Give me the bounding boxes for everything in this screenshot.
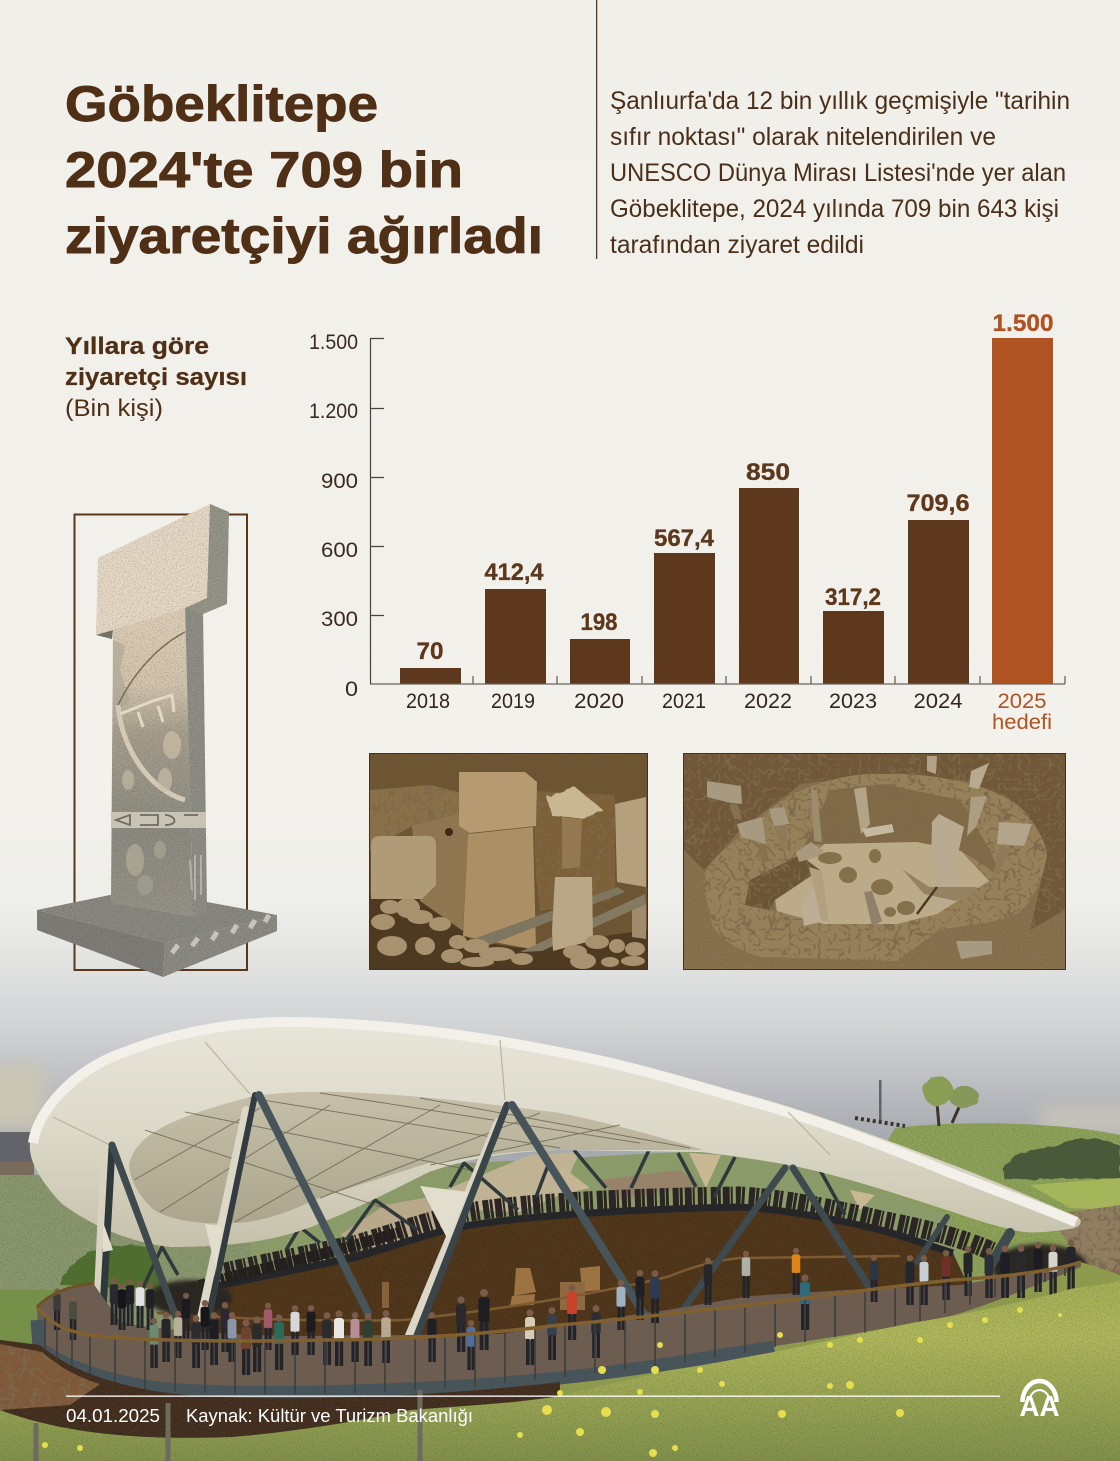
intro paragraph: sıfır noktası" olarak nitelendirilen ve bbox=[610, 123, 996, 151]
caption heading: ziyaretçi sayısı bbox=[65, 364, 247, 391]
far hill and green field bbox=[0, 1123, 1120, 1345]
y axis: 1.500 bbox=[309, 331, 358, 354]
foreground grass bbox=[0, 1280, 1120, 1461]
ground under deck edge bbox=[540, 1262, 1120, 1425]
rubble walls bbox=[370, 785, 470, 850]
sky and horizon bbox=[0, 1065, 1120, 1177]
title: 2024'te 709 bin bbox=[65, 142, 463, 198]
y axis: 900 bbox=[321, 470, 358, 493]
fourth leg pair bbox=[667, 1168, 871, 1332]
excavation pit bbox=[170, 1207, 975, 1348]
inner lower walkway rail bbox=[157, 1256, 900, 1321]
AA logo: AA bbox=[1020, 1391, 1060, 1423]
year labels: 2023 bbox=[829, 690, 877, 713]
y axis bbox=[309, 331, 384, 701]
y axis: 300 bbox=[321, 608, 358, 631]
bar value labels: 412,4 bbox=[484, 559, 544, 586]
caption heading bbox=[65, 333, 247, 391]
pillar base bbox=[37, 895, 277, 977]
caption unit: (Bin kişi) bbox=[65, 395, 163, 422]
year labels bbox=[406, 690, 1052, 734]
year labels: 2025 bbox=[998, 690, 1046, 713]
right end legs bbox=[917, 1217, 1010, 1266]
intro paragraph: Göbeklitepe, 2024 yılında 709 bin 643 kişi bbox=[610, 195, 1059, 223]
footer bbox=[66, 1381, 1060, 1426]
steel support legs bbox=[96, 1095, 1010, 1338]
source: Kaynak: Kültür ve Turizm Bakanlığı bbox=[186, 1406, 473, 1426]
back truss legs bbox=[142, 1150, 845, 1290]
year labels: 2019 bbox=[491, 690, 535, 713]
main photo: Göbeklitepe site under canopy bbox=[0, 1018, 1120, 1461]
standing pillars bbox=[707, 756, 1032, 959]
canopy outer shell bbox=[30, 1018, 1081, 1247]
photo: circular enclosure bbox=[683, 753, 1066, 970]
second leg pair bbox=[201, 1095, 368, 1318]
ceiling membrane bbox=[129, 1092, 703, 1223]
deck fascia bbox=[37, 1320, 774, 1392]
pillar top slab bbox=[96, 504, 229, 639]
title: Göbeklitepe bbox=[65, 76, 378, 132]
canopy seams bbox=[53, 1040, 830, 1155]
lower deck bbox=[37, 1262, 1081, 1392]
yellow flowers bbox=[42, 1307, 1062, 1457]
bar value labels: 567,4 bbox=[654, 525, 715, 552]
tree and lamp pole on hill bbox=[855, 1076, 979, 1126]
y axis: 0 bbox=[345, 678, 358, 701]
pillar carvings and tree shadow bbox=[111, 632, 269, 953]
background seen through canopy bbox=[250, 1150, 960, 1300]
enclosure floor bbox=[774, 842, 989, 924]
x axis bbox=[370, 676, 1065, 684]
intro paragraph bbox=[610, 87, 1070, 259]
ceiling cable grid bbox=[134, 1093, 690, 1222]
bar value labels: 317,2 bbox=[825, 584, 881, 611]
canopy roof bbox=[30, 1018, 1081, 1247]
photo frame bbox=[683, 753, 1066, 970]
y axis: 600 bbox=[321, 539, 358, 562]
upper walkway with crowd bbox=[148, 1196, 1088, 1316]
T-pillar image with frame bbox=[37, 504, 277, 977]
rocky soil below deck bbox=[0, 1340, 560, 1445]
year labels: 2018 bbox=[406, 690, 450, 713]
frame bbox=[74, 514, 247, 970]
footer rule bbox=[66, 1396, 1000, 1397]
bar value labels: 1.500 bbox=[992, 310, 1054, 337]
wooden sticks bbox=[917, 887, 937, 914]
bar value labels: 850 bbox=[746, 459, 790, 486]
ring wall bbox=[704, 774, 1047, 961]
year labels: 2024 bbox=[914, 690, 963, 713]
date: 04.01.2025 bbox=[66, 1406, 160, 1426]
outer rubble walls bbox=[684, 754, 1065, 930]
bar value labels: 70 bbox=[416, 638, 444, 665]
bar chart bbox=[309, 310, 1065, 734]
inner back wall bbox=[805, 784, 1000, 875]
fence posts bbox=[36, 1390, 420, 1461]
standing stones bbox=[412, 814, 468, 931]
title bbox=[65, 76, 543, 264]
title: ziyaretçiyi ağırladı bbox=[65, 208, 543, 264]
pillar shaft bbox=[111, 604, 207, 917]
bar value labels bbox=[416, 310, 1054, 665]
left leg pair bbox=[96, 1145, 182, 1333]
intro paragraph: UNESCO Dünya Mirası Listesi'nde yer alan bbox=[610, 159, 1066, 187]
deck rail bbox=[37, 1262, 1081, 1394]
crowd on lower deck bbox=[53, 1240, 1076, 1375]
photo: T-pillars close-up bbox=[369, 753, 648, 970]
bar value labels: 198 bbox=[580, 609, 618, 636]
intro paragraph: Şanlıurfa'da 12 bin yıllık geçmişiyle "tarihin bbox=[610, 87, 1070, 115]
year labels: 2022 bbox=[744, 690, 792, 713]
white canvas flaps bbox=[103, 1186, 468, 1270]
rubble pile bbox=[371, 898, 645, 969]
vertical divider bbox=[596, 0, 597, 259]
panel: chart caption bbox=[65, 333, 247, 422]
intro paragraph: tarafından ziyaret edildi bbox=[610, 231, 864, 259]
year labels: 2021 bbox=[662, 690, 706, 713]
stones in pit bbox=[382, 1266, 600, 1310]
y axis: 1.200 bbox=[309, 400, 358, 423]
third leg pair bbox=[408, 1105, 656, 1338]
year labels: hedefi bbox=[992, 711, 1052, 734]
caption heading: Yıllara göre bbox=[65, 333, 209, 360]
rubble in floor bbox=[818, 849, 915, 917]
year labels: 2020 bbox=[574, 690, 624, 713]
canopy rim bbox=[33, 1022, 1076, 1222]
soil under rocks bbox=[370, 890, 647, 969]
bar value labels: 709,6 bbox=[906, 490, 970, 517]
photo frame bbox=[369, 753, 648, 970]
bars bbox=[400, 338, 1053, 684]
